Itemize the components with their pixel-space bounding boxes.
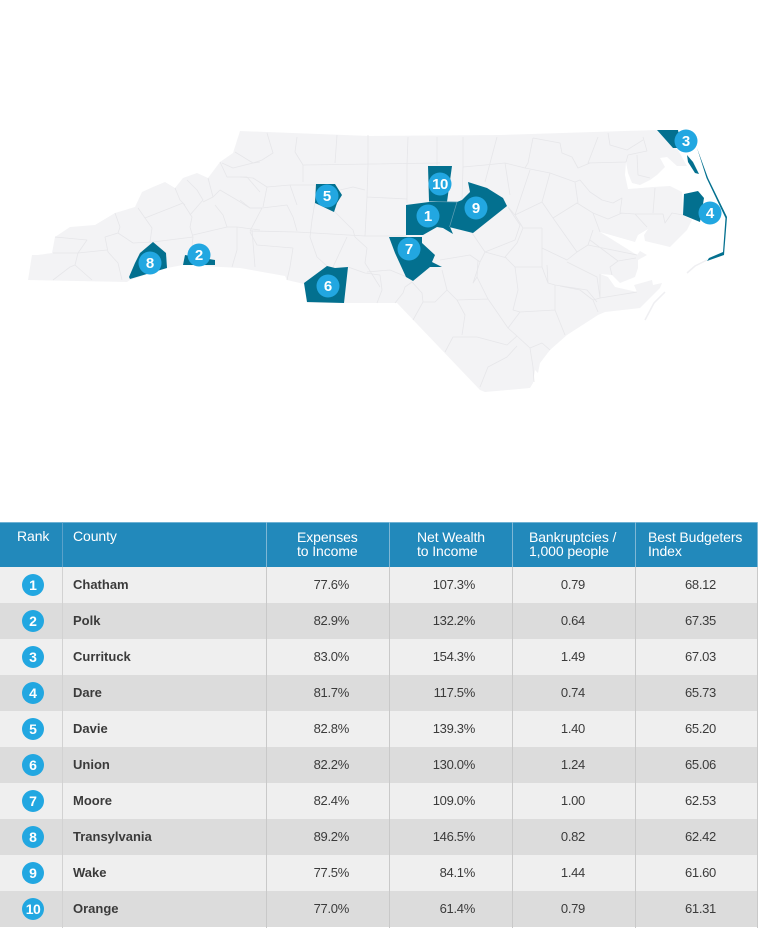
row 8: 62.42 bbox=[685, 829, 716, 844]
row 4: 4 bbox=[29, 685, 37, 701]
row 5: 5 bbox=[29, 721, 37, 737]
row 8: 0.82 bbox=[561, 829, 585, 844]
row 10: 61.4% bbox=[440, 901, 475, 916]
row 6: 65.06 bbox=[685, 757, 716, 772]
row 4: Dare bbox=[73, 685, 102, 700]
county: Dare bbox=[683, 178, 727, 261]
row 5: Davie bbox=[73, 721, 108, 736]
row 10: 0.79 bbox=[561, 901, 585, 916]
row 6: 82.2% bbox=[314, 757, 349, 772]
county: Moore bbox=[389, 237, 442, 281]
table header: Index bbox=[648, 543, 682, 559]
badge: 10: 10 bbox=[432, 176, 448, 193]
row 3: 1.49 bbox=[561, 649, 585, 664]
row 6 bbox=[0, 747, 758, 783]
row 2: 2 bbox=[29, 613, 37, 629]
badge: 7 bbox=[398, 238, 420, 260]
row 7 bbox=[0, 783, 758, 819]
county: Wake bbox=[449, 182, 507, 233]
row 9: 9 bbox=[29, 865, 37, 881]
row 1: 77.6% bbox=[314, 577, 349, 592]
row 10: Orange bbox=[73, 901, 119, 916]
row 8: 146.5% bbox=[433, 829, 475, 844]
row 7: 7 bbox=[29, 793, 37, 809]
row 10: 77.0% bbox=[314, 901, 349, 916]
county: Polk bbox=[183, 255, 215, 265]
badge: 9: 9 bbox=[472, 200, 480, 217]
row 3 bbox=[0, 639, 758, 675]
row 3: 67.03 bbox=[685, 649, 716, 664]
row 5: 1.40 bbox=[561, 721, 585, 736]
county: Chatham bbox=[406, 202, 457, 235]
table header: Rank bbox=[17, 528, 49, 544]
row 8: 89.2% bbox=[314, 829, 349, 844]
county: Orange bbox=[428, 166, 452, 202]
row 9: 77.5% bbox=[314, 865, 349, 880]
row 4: 0.74 bbox=[561, 685, 585, 700]
row 2: 67.35 bbox=[685, 613, 716, 628]
row 5: 82.8% bbox=[314, 721, 349, 736]
badge: 9 bbox=[464, 196, 488, 220]
table header: Bankruptcies / bbox=[529, 529, 616, 545]
row 7: 109.0% bbox=[433, 793, 475, 808]
table header: to Income bbox=[417, 543, 478, 559]
row 6: 6 bbox=[29, 757, 37, 773]
row 2: 0.64 bbox=[561, 613, 585, 628]
row 6: 1.24 bbox=[561, 757, 585, 772]
badge: 3: 3 bbox=[682, 133, 690, 150]
row 4: 117.5% bbox=[434, 685, 475, 700]
table header: 1,000 people bbox=[529, 543, 609, 559]
county: Davie bbox=[315, 184, 342, 212]
row 1 bbox=[0, 567, 758, 603]
row 3: Currituck bbox=[73, 649, 131, 664]
badge: 4: 4 bbox=[706, 205, 715, 222]
row 10: 61.31 bbox=[685, 901, 716, 916]
badge: 1 bbox=[416, 204, 440, 228]
row 5: 139.3% bbox=[433, 721, 475, 736]
table header: County bbox=[73, 528, 117, 544]
badge: 3 bbox=[674, 130, 698, 152]
row 1: 107.3% bbox=[433, 577, 475, 592]
badge: 6: 6 bbox=[324, 278, 332, 295]
row 1: 68.12 bbox=[685, 577, 716, 592]
row 9: Wake bbox=[73, 865, 106, 880]
badge: 2: 2 bbox=[195, 247, 203, 264]
row 10: 10 bbox=[26, 901, 40, 917]
table header: Best Budgeters bbox=[648, 529, 742, 545]
table header: Expenses bbox=[297, 529, 358, 545]
row 6: 130.0% bbox=[433, 757, 475, 772]
row 2: 82.9% bbox=[314, 613, 349, 628]
row 10 bbox=[0, 891, 758, 927]
badge: 1: 1 bbox=[424, 208, 432, 225]
row 4: 81.7% bbox=[314, 685, 349, 700]
state outline bbox=[28, 130, 707, 392]
row 3: 154.3% bbox=[433, 649, 475, 664]
row 3: 83.0% bbox=[314, 649, 349, 664]
row 9: 84.1% bbox=[440, 865, 475, 880]
row 8 bbox=[0, 819, 758, 855]
row 3: 3 bbox=[29, 649, 37, 665]
badge: 8 bbox=[138, 252, 162, 274]
badge: 10 bbox=[428, 172, 452, 196]
county boundary lines bbox=[53, 133, 683, 387]
badge: 5: 5 bbox=[323, 188, 331, 205]
badge: 8: 8 bbox=[146, 255, 154, 272]
row 4: 65.73 bbox=[685, 685, 716, 700]
row 7: 1.00 bbox=[561, 793, 585, 808]
row 5: 65.20 bbox=[685, 721, 716, 736]
table header: to Income bbox=[297, 543, 358, 559]
row 8: 8 bbox=[29, 829, 37, 845]
row 2: 132.2% bbox=[433, 613, 475, 628]
row 1: 0.79 bbox=[561, 577, 585, 592]
row 5 bbox=[0, 711, 758, 747]
row 7: 62.53 bbox=[685, 793, 716, 808]
county: Currituck bbox=[657, 130, 708, 178]
row 4 bbox=[0, 675, 758, 711]
row 9: 1.44 bbox=[561, 865, 585, 880]
row 9 bbox=[0, 855, 758, 891]
row 7: 82.4% bbox=[314, 793, 349, 808]
row 2: Polk bbox=[73, 613, 100, 628]
badge: 4 bbox=[698, 202, 722, 224]
row 1: Chatham bbox=[73, 577, 129, 592]
table header bbox=[0, 522, 758, 567]
badge: 2 bbox=[188, 244, 210, 266]
row 7: Moore bbox=[73, 793, 112, 808]
row 1: 1 bbox=[29, 577, 37, 593]
ranking table bbox=[0, 522, 758, 928]
row 2 bbox=[0, 603, 758, 639]
badge: 7: 7 bbox=[405, 241, 413, 258]
badge: 6 bbox=[316, 274, 340, 298]
table header: Net Wealth bbox=[417, 529, 485, 545]
county: Union bbox=[304, 266, 348, 303]
county: Transylvania bbox=[129, 242, 167, 279]
badge: 5 bbox=[316, 184, 338, 208]
map: North Carolina counties bbox=[28, 130, 727, 392]
row 6: Union bbox=[73, 757, 110, 772]
row 9: 61.60 bbox=[685, 865, 716, 880]
row 8: Transylvania bbox=[73, 829, 152, 844]
